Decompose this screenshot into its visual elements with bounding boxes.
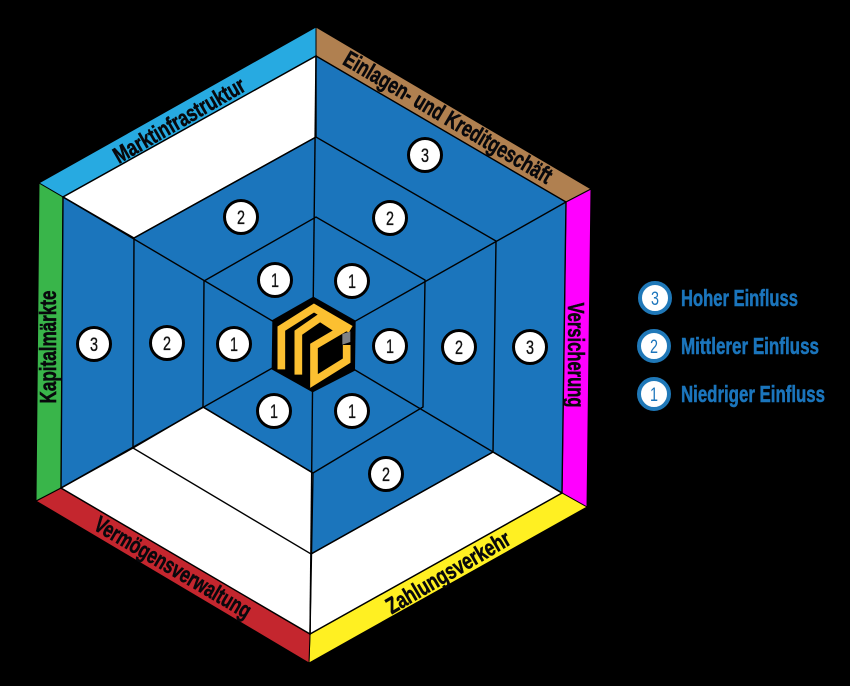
badge 2 Markt: 2 <box>237 208 245 229</box>
hexagon chart <box>35 27 591 663</box>
legend item: Niedriger Einfluss: 1 <box>650 385 658 406</box>
legend item: Hoher Einfluss: Hoher Einfluss <box>681 285 798 311</box>
badge 2 Kapital <box>150 326 184 360</box>
badge 1 Zahlung: 1 <box>348 402 356 423</box>
badge 3 Versicherung <box>514 330 546 364</box>
white ring segment: Marktinfrastruktur <box>63 56 316 238</box>
badge 1 Kapital: 1 <box>230 335 238 356</box>
band: Vermögensverwaltung <box>36 488 310 663</box>
label: Einlagen- und Kreditgeschäft: Einlagen- und Kreditgeschäft <box>339 46 557 189</box>
white ring segment: Vermögensverwaltung <box>61 407 313 634</box>
band: Zahlungsverkehr <box>309 493 587 663</box>
badge 2 Versicherung: 2 <box>455 338 463 359</box>
badge 2 Einlagen: 2 <box>386 209 394 230</box>
white ring segment: Zahlungsverkehr <box>310 452 562 634</box>
band labels <box>35 46 589 623</box>
badge 1 Vermögen <box>258 394 290 428</box>
legend item: Hoher Einfluss <box>640 283 798 313</box>
legend item: Hoher Einfluss: 3 <box>651 289 659 310</box>
label: Versicherung: Versicherung <box>563 302 589 408</box>
rating badges <box>78 138 546 490</box>
ring lines <box>61 56 566 634</box>
badge 1 Vermögen: 1 <box>270 402 278 423</box>
badge 2 Versicherung <box>442 330 476 364</box>
badge 3 Versicherung: 3 <box>526 338 534 359</box>
badge 2 Kapital: 2 <box>163 334 171 355</box>
legend item: Mittlerer Einfluss: 2 <box>650 337 658 358</box>
center logo <box>272 297 356 392</box>
badge 2 Einlagen <box>374 202 406 234</box>
badge 2 Zahlung: 2 <box>382 465 390 486</box>
badge 2 Markt <box>224 200 258 234</box>
badge 1 Einlagen <box>336 264 368 298</box>
badge 1 Versicherung: 1 <box>386 337 394 358</box>
legend <box>639 283 825 409</box>
legend item: Niedriger Einfluss <box>639 379 825 409</box>
badge 3 Kapital: 3 <box>90 335 98 356</box>
label: Zahlungsverkehr: Zahlungsverkehr <box>381 525 515 619</box>
badge 1 Versicherung <box>374 330 406 362</box>
band: Einlagen- und Kreditgeschäft <box>316 27 591 202</box>
sector fill: inner hexagon area <box>61 56 566 634</box>
band: Kapitalmärkte <box>36 183 63 501</box>
band: Versicherung <box>562 189 591 507</box>
badge 3 Einlagen: 3 <box>421 146 429 167</box>
badge 1 Zahlung <box>336 394 368 428</box>
badge 2 Zahlung <box>370 458 402 490</box>
label: Vermögensverwaltung: Vermögensverwaltung <box>90 511 256 623</box>
legend item: Mittlerer Einfluss <box>639 331 819 361</box>
band: Marktinfrastruktur <box>39 27 316 197</box>
badge 1 Markt <box>258 264 292 296</box>
badge 3 Einlagen <box>408 138 442 172</box>
badge 1 Markt: 1 <box>271 271 279 292</box>
badge 1 Kapital <box>218 328 250 360</box>
badge 3 Kapital <box>78 328 110 360</box>
label: Kapitalmärkte: Kapitalmärkte <box>35 290 61 404</box>
badge 1 Einlagen: 1 <box>348 272 356 293</box>
label: Marktinfrastruktur: Marktinfrastruktur <box>108 72 250 168</box>
